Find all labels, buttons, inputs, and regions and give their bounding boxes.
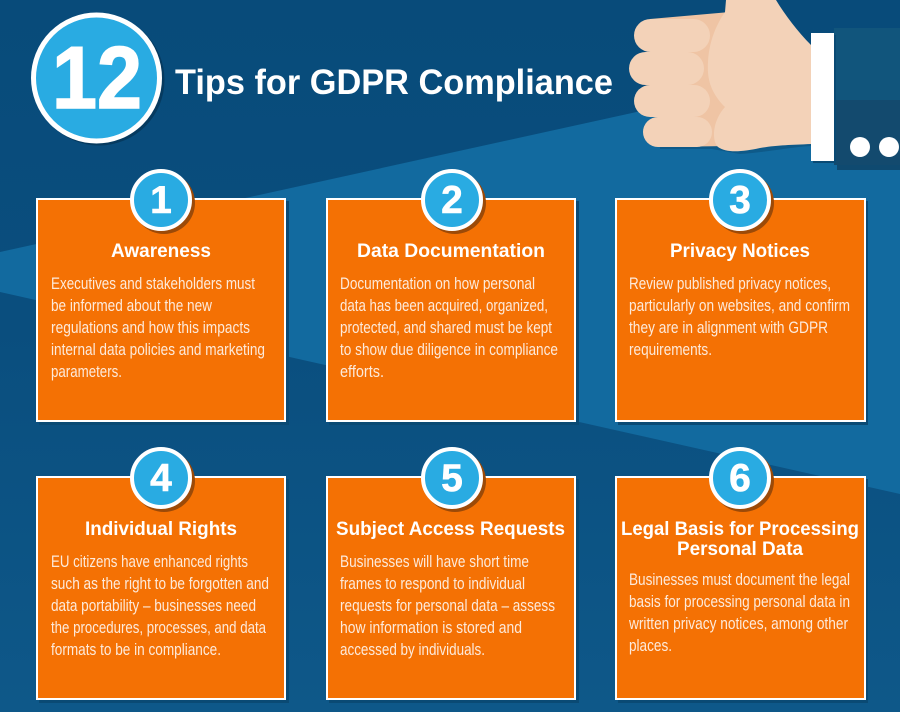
- hand icon: [629, 0, 900, 170]
- panel: 6 Legal Basis: basis for processing personal data in: [629, 593, 850, 611]
- panel: 2 Data Documentation: data has been acquired, organized,: [340, 297, 548, 315]
- fingers: [629, 19, 712, 147]
- panel: 4 Individual Rights: Individual Rights: [85, 519, 237, 540]
- panel: 6 Legal Basis: 6: [729, 457, 751, 500]
- panel: 4 Individual Rights: EU citizens have enhanced rights: [51, 553, 248, 571]
- title badge: [34, 14, 164, 146]
- panel: 5 Subject Access Requests: requests for personal data – assess: [340, 597, 555, 615]
- panel: 2 Data Documentation: to show due diligence in compliance: [340, 341, 558, 359]
- title: Tips for GDPR Compliance: [175, 63, 613, 102]
- panel: 2 Data Documentation: Documentation on how personal: [340, 275, 535, 293]
- panel: 6 Legal Basis: written privacy notices, among other: [628, 615, 848, 633]
- panel: 5 Subject Access Requests: how information is stored and: [340, 619, 522, 637]
- sleeve: [834, 28, 900, 170]
- panel: 1 Awareness: Executives and stakeholders must: [51, 275, 255, 293]
- panel: 5 Subject Access Requests: frames to respond to individual: [340, 575, 525, 593]
- panel: 1 Awareness: [37, 171, 289, 425]
- panel: 5 Subject Access Requests: Subject Access Requests: [336, 519, 565, 540]
- panel: 3 Privacy Notices: particularly on websites, and confirm: [629, 297, 850, 315]
- panel: 2 Data Documentation: [327, 171, 579, 425]
- panel: 1 Awareness: internal data policies and marketing: [51, 341, 265, 359]
- finger base: [650, 12, 730, 147]
- panel: 6 Legal Basis: places.: [629, 637, 672, 655]
- panel: 4 Individual Rights: such as the right to be forgotten and: [51, 575, 269, 593]
- panel: 1 Awareness: Awareness: [111, 241, 211, 262]
- hand shadow: [660, 130, 811, 154]
- panel: 3 Privacy Notices: they are in alignment with GDPR: [629, 319, 828, 337]
- panel: 6 Legal Basis: Personal Data: [677, 539, 803, 560]
- panel: 2 Data Documentation: Data Documentation: [357, 241, 545, 262]
- panel: 6 Legal Basis: Legal Basis for Processing: [621, 519, 859, 540]
- panel: 5 Subject Access Requests: 5: [441, 457, 463, 500]
- panel: 1 Awareness: regulations and how this impacts: [51, 319, 250, 337]
- panel: 3 Privacy Notices: 3: [729, 179, 751, 222]
- panel: 3 Privacy Notices: Privacy Notices: [670, 241, 810, 262]
- palm and thumb: [708, 0, 811, 151]
- panel: 4 Individual Rights: data portability – businesses need: [51, 597, 256, 615]
- panel: 3 Privacy Notices: requirements.: [629, 341, 712, 359]
- panel: 6 Legal Basis: [616, 449, 868, 703]
- panel: 3 Privacy Notices: Review published privacy notices,: [629, 275, 831, 293]
- panel: 2 Data Documentation: 2: [441, 179, 463, 222]
- panel: 4 Individual Rights: [37, 449, 289, 703]
- panel: 6 Legal Basis: Businesses must document the legal: [629, 571, 850, 589]
- panel: 3 Privacy Notices: [616, 171, 868, 425]
- cuff: [811, 33, 836, 163]
- panel: 1 Awareness: parameters.: [51, 363, 122, 381]
- panel: 4 Individual Rights: formats to be in compliance.: [51, 641, 221, 659]
- panel: 5 Subject Access Requests: accessed by individuals.: [340, 641, 485, 659]
- background light ray: [0, 54, 900, 494]
- panel: 5 Subject Access Requests: [327, 449, 579, 703]
- title badge: 12: [52, 28, 142, 127]
- panel: 1 Awareness: be informed about the new: [51, 297, 212, 315]
- panel: 5 Subject Access Requests: Businesses will have short time: [340, 553, 529, 571]
- panel: 2 Data Documentation: efforts.: [340, 363, 384, 381]
- panel: 4 Individual Rights: the procedures, processes, and data: [51, 619, 267, 637]
- panel: 2 Data Documentation: protected, and shared must be kept: [340, 319, 552, 337]
- panel: 1 Awareness: 1: [150, 179, 172, 222]
- panel: 4 Individual Rights: 4: [150, 457, 172, 500]
